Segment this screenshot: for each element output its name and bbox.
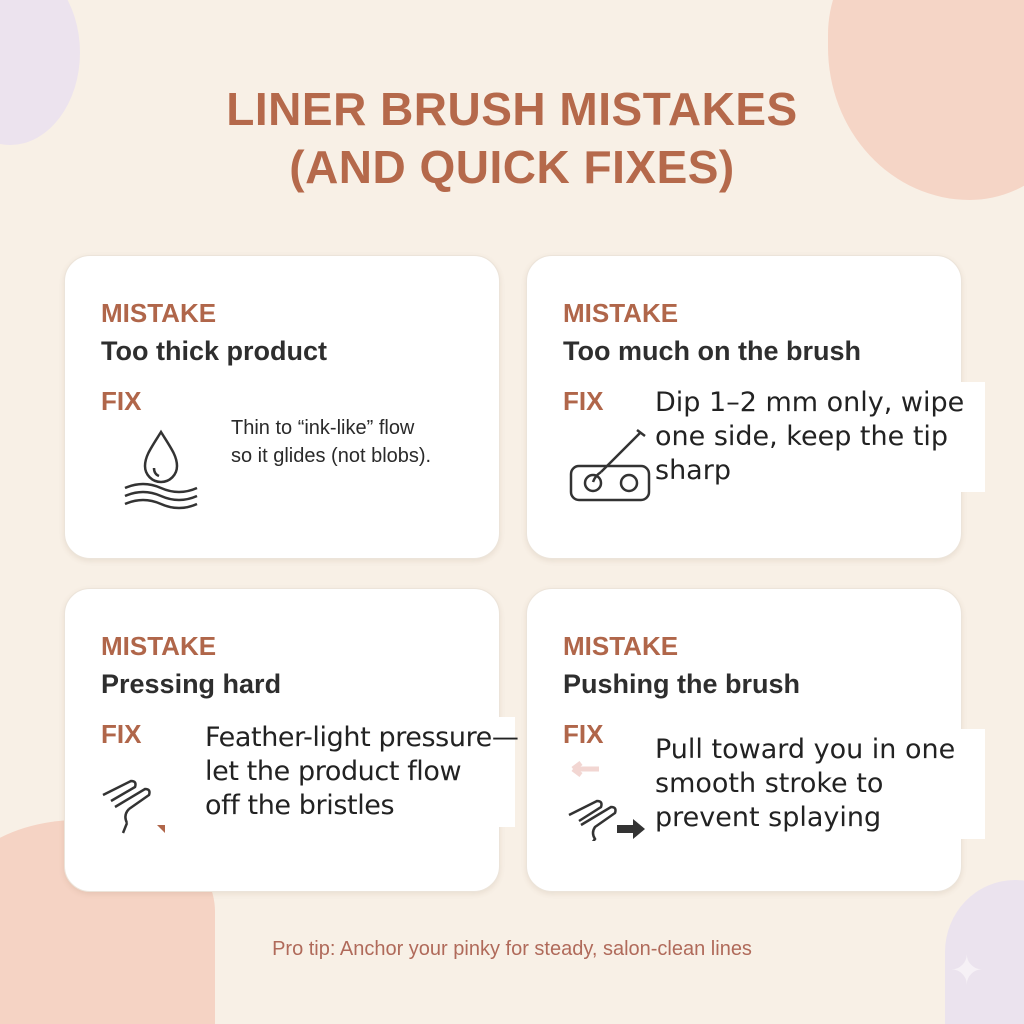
text: fix 1 [231, 417, 431, 467]
text: fix 4: prevent splaying [655, 802, 881, 833]
panel: too thick product [64, 255, 500, 559]
text: fix 2: one side, keep the tip [655, 421, 948, 452]
icon: palette and brush [570, 429, 650, 502]
panel: pressing hard: FIX [101, 719, 141, 749]
text: fix 3 [201, 717, 515, 827]
panel: too much on the brush: Too much on the brush [563, 336, 861, 366]
panel: too much on the brush: MISTAKE [563, 298, 678, 328]
icon: water drop [124, 430, 198, 510]
decorative blobs [0, 0, 80, 145]
title [226, 83, 798, 193]
icon: sparkle: ✦ [950, 949, 984, 993]
text: fix 3: let the product flow [205, 756, 461, 787]
text: fix 3: off the bristles [205, 790, 394, 821]
panel: too thick product: Too thick product [101, 336, 327, 366]
panel: too much on the brush: FIX [563, 386, 603, 416]
text: fix 2 [651, 382, 985, 492]
text: fix 3: Feather-light pressure— [205, 722, 518, 753]
text: fix 1: so it glides (not blobs). [231, 445, 431, 467]
footer: pro tip: Pro tip: Anchor your pinky for steady, salon-clean lines [272, 938, 752, 960]
panel: pressing hard [64, 588, 500, 892]
text: fix 4: smooth stroke to [655, 768, 883, 799]
text: fix 2: sharp [655, 455, 731, 486]
panel: too thick product: FIX [101, 386, 141, 416]
panel: too much on the brush [526, 255, 962, 559]
panel: pushing the brush [526, 588, 962, 892]
text: fix 2: Dip 1–2 mm only, wipe [655, 387, 964, 418]
panel: too thick product: MISTAKE [101, 298, 216, 328]
panel: pushing the brush: MISTAKE [563, 631, 678, 661]
text: fix 4 [651, 729, 985, 839]
title: LINER BRUSH MISTAKES [226, 83, 798, 135]
panel: pushing the brush: Pushing the brush [563, 669, 800, 699]
panel: pressing hard: MISTAKE [101, 631, 216, 661]
icon: hand [102, 780, 165, 834]
panel: pushing the brush: FIX [563, 719, 603, 749]
icon: hand with arrows [568, 761, 645, 841]
panel: pressing hard: Pressing hard [101, 669, 281, 699]
text: fix 4: Pull toward you in one [655, 734, 955, 765]
title: (AND QUICK FIXES) [289, 141, 735, 193]
text: fix 1: Thin to “ink-like” flow [231, 417, 414, 439]
